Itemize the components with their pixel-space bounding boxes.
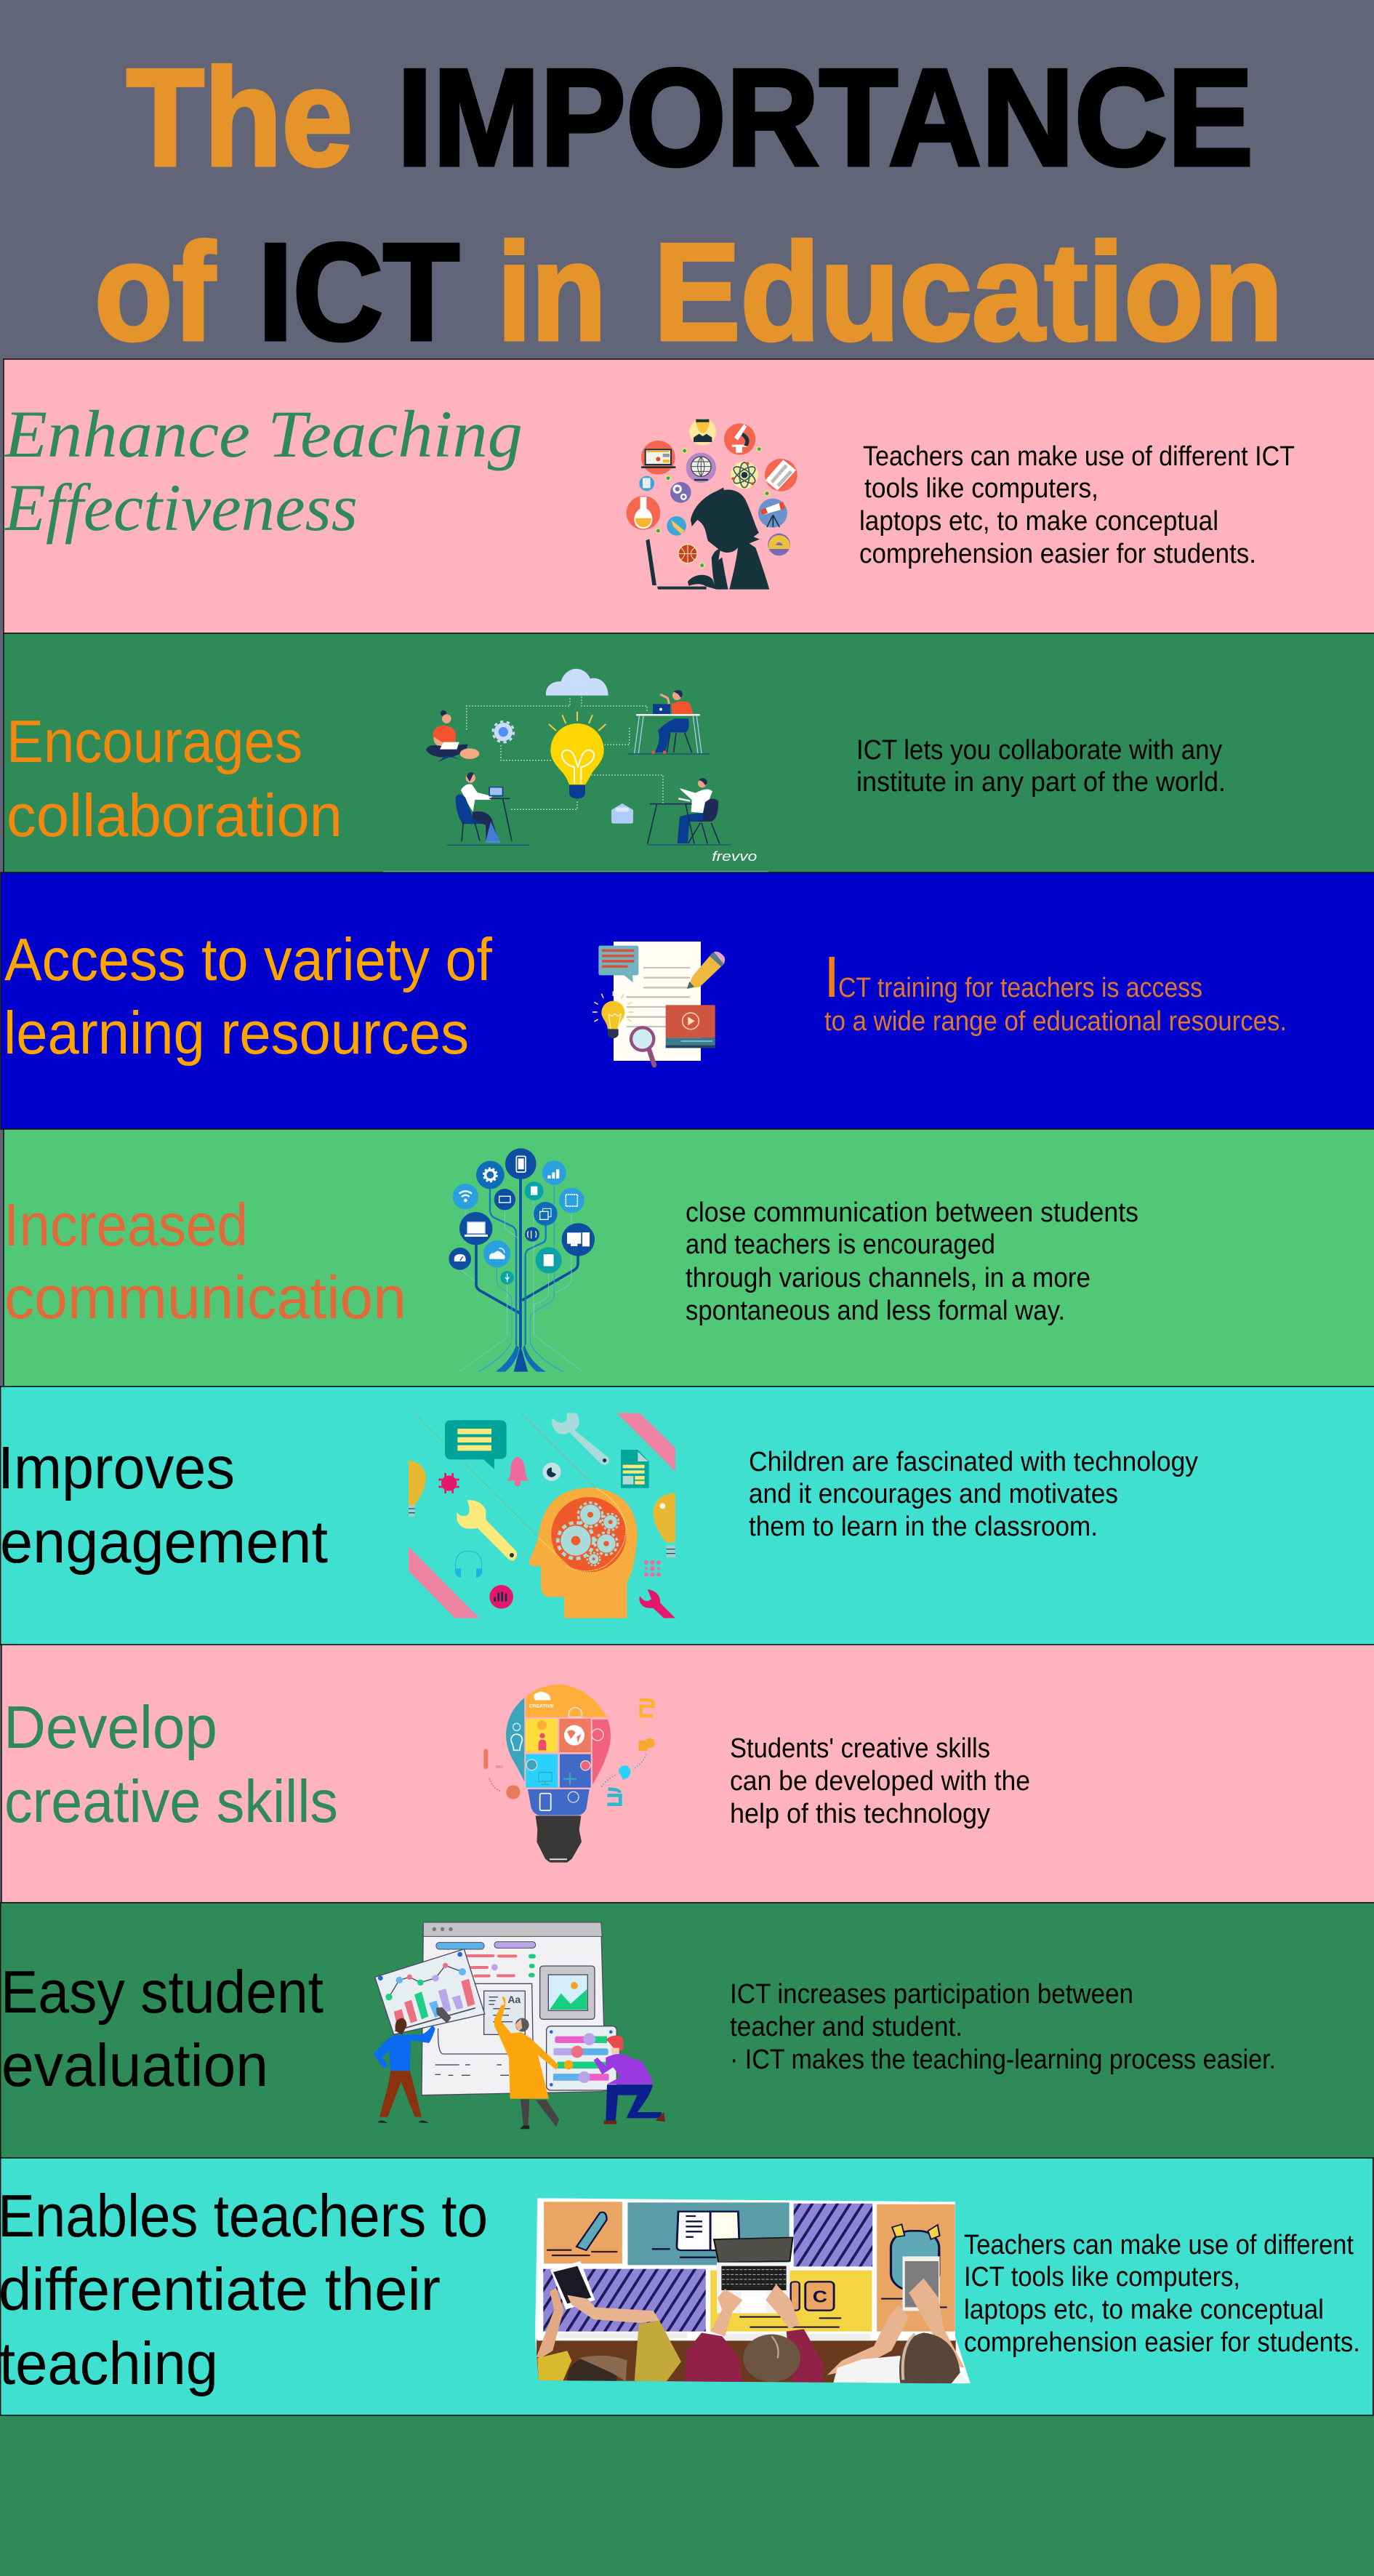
heading (1, 1958, 324, 2099)
heading: differentiate their (0, 2255, 441, 2323)
panel: develop creative skills (1, 1645, 1374, 1903)
body text: Teachers can make use of different ICT (863, 441, 1295, 472)
heading: learning resources (4, 999, 469, 1067)
footer band (0, 2416, 1374, 2576)
body text: through various channels, in a more (686, 1263, 1090, 1293)
body text (859, 441, 1295, 569)
icon: document with learning tools (592, 942, 725, 1065)
heading (0, 1434, 328, 1576)
body text (964, 2230, 1360, 2358)
body text: and it encourages and motivates (749, 1479, 1118, 1509)
panel: easy student evaluation (1, 1903, 1374, 2158)
heading: evaluation (1, 2031, 268, 2099)
body text (824, 944, 1287, 1037)
person in blue (373, 2018, 435, 2123)
body text: laptops etc, to make conceptual (859, 506, 1218, 537)
title: The (126, 41, 353, 195)
photo: students with devices at a table (535, 2198, 971, 2383)
heading (4, 1191, 406, 1331)
body text: Children are fascinated with technology (749, 1447, 1198, 1477)
man at table (648, 778, 731, 845)
heading (3, 397, 523, 545)
body text: ICT lets you collaborate with any (856, 735, 1222, 766)
icon: team working on a dashboard (373, 1922, 665, 2129)
panel: encourages collaboration (4, 633, 1374, 872)
heading (0, 2182, 488, 2397)
body text: Students' creative skills (730, 1733, 990, 1764)
heading (4, 926, 493, 1067)
heading: creative skills (4, 1768, 338, 1835)
body text: help of this technology (730, 1799, 990, 1829)
panel: increased communication (4, 1129, 1374, 1387)
heading: Enhance Teaching (3, 397, 523, 471)
body text: and teachers is encouraged (686, 1229, 995, 1260)
heading: teaching (0, 2330, 218, 2397)
title: Education (654, 215, 1283, 369)
body text: to a wide range of educational resources. (824, 1006, 1287, 1037)
heading: collaboration (7, 782, 342, 849)
heading: Develop (4, 1693, 217, 1761)
icon: people connected by a light bulb (383, 669, 768, 872)
man at desk (447, 772, 530, 845)
title: in (497, 215, 606, 369)
heading: Access to variety of (4, 926, 493, 993)
body text (749, 1447, 1198, 1542)
body text: institute in any part of the world. (856, 767, 1226, 798)
photo: students with devices at a table: C (813, 2288, 827, 2306)
heading: Easy student (1, 1958, 324, 2026)
body text (730, 1979, 1276, 2075)
body text: ICT increases participation between (730, 1979, 1133, 2010)
body text: tools like computers, (864, 473, 1098, 504)
heading: Encourages (7, 707, 302, 775)
icon: student with subject bubbles (627, 419, 798, 590)
title: ICT (258, 215, 459, 369)
icon: technology tree (449, 1148, 595, 1372)
panel: access to learning resources (1, 872, 1374, 1129)
body text: ICT tools like computers, (964, 2262, 1240, 2292)
icon: team working on a dashboard: Aa (507, 1994, 521, 2005)
body text: can be developed with the (730, 1766, 1030, 1797)
logo text: frevvo (712, 848, 757, 864)
body text: CT training for teachers is access (838, 973, 1202, 1003)
heading: Enables teachers to (0, 2182, 488, 2250)
heading: Increased (4, 1191, 248, 1259)
body text: them to learn in the classroom. (749, 1512, 1098, 1542)
woman at table (627, 690, 710, 754)
person in purple (594, 2036, 665, 2124)
heading: engagement (0, 1508, 328, 1576)
panel: enhance teaching effectiveness (3, 359, 1374, 633)
heading: Improves (0, 1434, 235, 1501)
body text: · ICT makes the teaching-learning process easier. (730, 2045, 1276, 2075)
body text (686, 1197, 1138, 1326)
body text: close communication between students (686, 1197, 1138, 1228)
body text: laptops etc, to make conceptual (964, 2295, 1324, 2325)
body text: teacher and student. (730, 2012, 963, 2042)
panel: improves engagement (0, 1387, 1374, 1645)
person in yellow (494, 1997, 559, 2129)
icon: puzzle light bulb (486, 1685, 655, 1863)
icon: puzzle light bulb: IDEA (495, 1765, 504, 1768)
title: of (95, 215, 216, 369)
title (95, 41, 1283, 369)
icon: head with gears and tools (409, 1413, 675, 1618)
panel: differentiate teaching (0, 2158, 1373, 2415)
heading: communication (4, 1264, 406, 1331)
heading (4, 1693, 338, 1835)
heading: Effectiveness (3, 470, 358, 545)
sitting woman (426, 710, 479, 762)
heading (7, 707, 342, 849)
body text: I (824, 944, 840, 1009)
creative label: CREATIVE (529, 1704, 554, 1709)
title: IMPORTANCE (397, 41, 1253, 195)
body text: spontaneous and less formal way. (686, 1296, 1065, 1326)
body text: comprehension easier for students. (859, 539, 1256, 569)
body text (856, 735, 1226, 798)
body text (730, 1733, 1030, 1829)
